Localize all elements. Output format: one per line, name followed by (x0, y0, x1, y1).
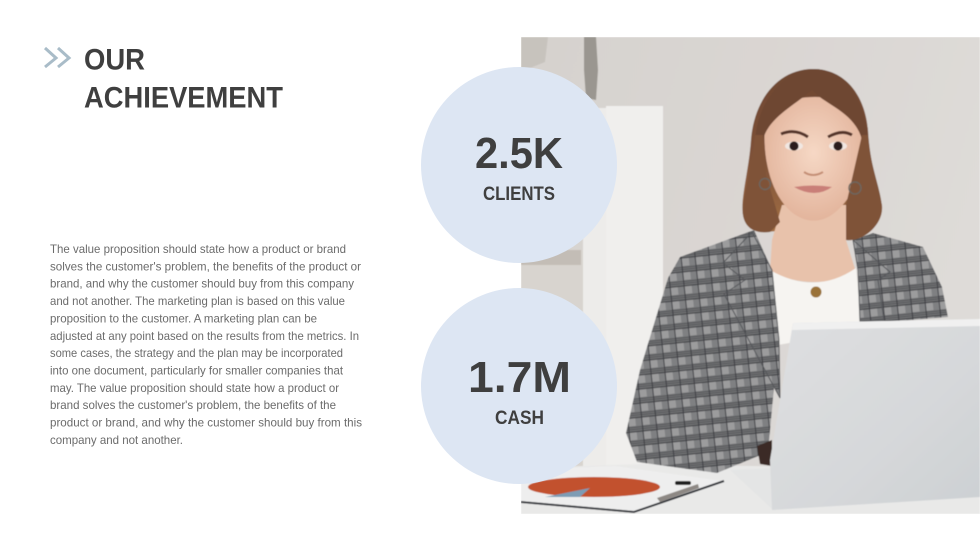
circle: cash stat: CASH (495, 407, 544, 429)
circle: clients stat: 2.5K (475, 129, 563, 178)
clipboard with chart (521, 476, 725, 514)
body text: into one document, particularly for smaller companies that (50, 363, 344, 377)
title: ACHIEVEMENT (84, 82, 283, 114)
nose and mouth (794, 172, 832, 193)
body text: and not another. The marketing plan is based on this value (50, 294, 345, 308)
body text: The value proposition should state how a product or brand (50, 242, 346, 256)
circle: cash stat: 1.7M (468, 353, 571, 402)
body text (50, 242, 362, 447)
face (764, 97, 863, 221)
body text: proposition to the customer. A marketing plan can be (50, 311, 317, 325)
neck (770, 205, 856, 282)
blazer (626, 230, 778, 473)
earrings (760, 178, 861, 194)
circle: clients stat (421, 67, 617, 263)
body text: product or brand, and why the customer should buy from this (50, 416, 362, 430)
white cabinet (521, 106, 663, 466)
eyes and brows (781, 132, 852, 151)
body text: company and not another. (50, 433, 183, 447)
icon: double chevron (45, 48, 69, 67)
button (810, 286, 822, 298)
circle: clients stat: CLIENTS (483, 183, 555, 205)
lapels (723, 232, 780, 398)
white shirt (770, 268, 862, 345)
title: OUR (84, 44, 145, 76)
laptop (769, 319, 980, 510)
hair front (755, 69, 868, 140)
body text: solves the customer's problem, the benefits of the product or (50, 259, 361, 273)
body text: brand solves the customer's problem, the benefits of the (50, 398, 336, 412)
hand (757, 440, 772, 466)
title (84, 44, 283, 114)
body text: brand, and why the customer should buy from this company (50, 277, 354, 291)
hair back (742, 69, 882, 240)
body text: adjusted at any point based on the results from the metrics. In (50, 329, 359, 343)
plant (521, 37, 598, 100)
circle: cash stat (421, 288, 617, 484)
desk (521, 464, 980, 514)
body text: may. The value proposition should state how a product or (50, 381, 339, 395)
body text: some cases, the strategy and the plan may be incorporated (50, 346, 343, 360)
photo: woman at laptop (521, 37, 980, 514)
